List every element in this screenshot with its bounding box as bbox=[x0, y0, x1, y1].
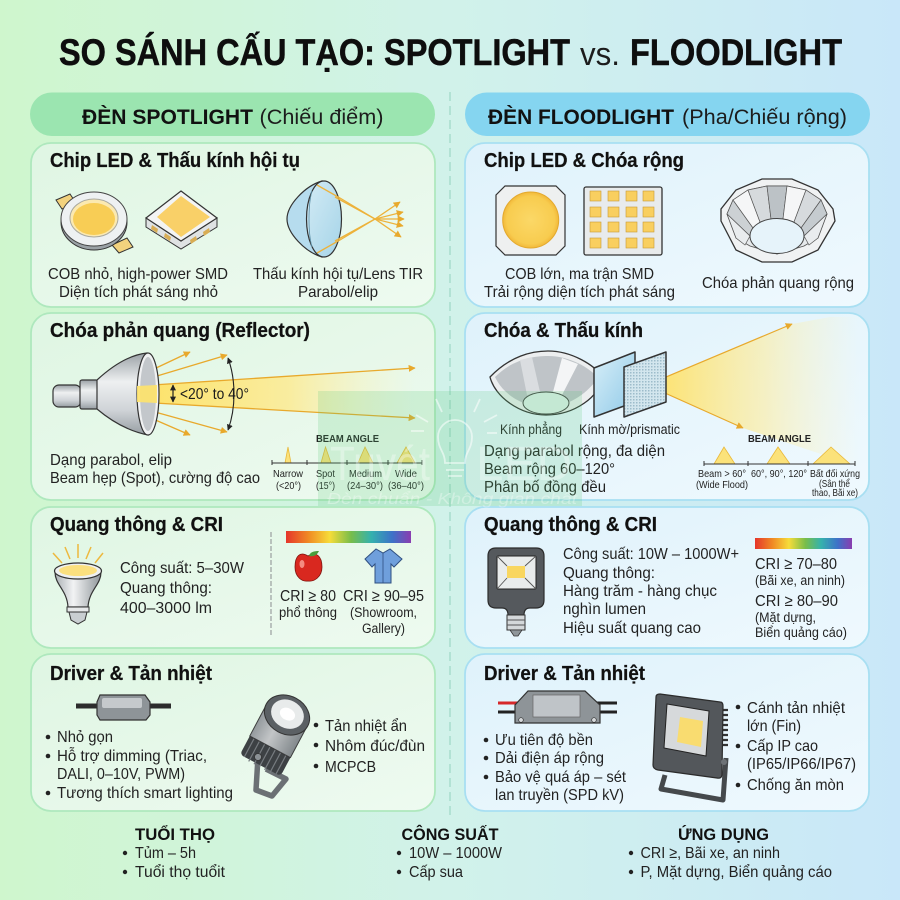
text: flat glass label: Kính phẳng bbox=[500, 422, 562, 437]
text: floodlight CRI values: CRI ≥ 70–80 bbox=[755, 556, 837, 573]
icon: rugged driver bbox=[498, 691, 617, 723]
icon: small COB chip bbox=[56, 192, 133, 253]
chart: spotlight beam angle: BEAM ANGLE bbox=[316, 433, 379, 445]
text: spotlight power and flux: Công suất: 5–30W bbox=[120, 560, 245, 577]
chart: spotlight beam angle: (<20°) bbox=[276, 480, 301, 492]
header: floodlight column: ĐÈN FLOODLIGHT bbox=[488, 106, 674, 129]
icon: shirt bbox=[365, 549, 402, 583]
panel: spotlight driver and heat sink bbox=[31, 654, 435, 811]
chart: floodlight beam angle: 60°, 90°, 120° bbox=[751, 468, 807, 480]
text: heat sink bullets bbox=[736, 700, 856, 794]
icon: floodlight fixture with fins bbox=[653, 694, 728, 800]
text: reflector description: Dạng parabol, elip bbox=[50, 452, 172, 469]
text: heat sink bullets: MCPCB bbox=[325, 759, 376, 776]
header: floodlight column bbox=[465, 92, 870, 136]
chart: floodlight beam angle: Bất đối xứng bbox=[810, 468, 860, 480]
text: driver bullets: DALI, 0–10V, PWM) bbox=[57, 766, 185, 783]
header: spotlight column: ĐÈN SPOTLIGHT bbox=[82, 106, 253, 129]
text: heat sink bullets: Nhôm đúc/đùn bbox=[325, 738, 425, 755]
icon: flat glass bbox=[594, 352, 635, 417]
text: floodlight CRI values: (Mặt dựng, bbox=[755, 610, 816, 625]
wide beam bbox=[647, 317, 860, 467]
text: lens caption bbox=[253, 266, 423, 301]
panel: floodlight luminous flux and CRI bbox=[465, 507, 869, 648]
icon: large COB chip bbox=[496, 186, 565, 255]
chart: spotlight beam angle bbox=[272, 433, 424, 492]
heading: Chóa phản quang (Reflector) bbox=[50, 320, 310, 342]
title: SO SÁNH CẤU TẠO: SPOTLIGHT bbox=[59, 32, 570, 73]
title: vs. bbox=[580, 36, 620, 72]
text: prismatic glass label: Kính mờ/prismatic bbox=[579, 422, 680, 437]
icon: wide faceted reflector bbox=[721, 179, 835, 262]
text: chip caption bbox=[48, 266, 228, 301]
text: chip caption: Diện tích phát sáng nhỏ bbox=[59, 284, 218, 301]
text: driver bullets: Nhỏ gọn bbox=[57, 729, 113, 746]
icon: SMD matrix bbox=[584, 187, 662, 255]
footer: applications bbox=[629, 825, 832, 881]
watermark: Tuvét bbox=[330, 438, 430, 491]
text: floodlight driver bullets: Ưu tiên độ bền bbox=[495, 732, 593, 749]
text: floodlight driver bullets: lan truyền (SPD kV) bbox=[495, 787, 624, 804]
chart: floodlight beam angle: (Wide Flood) bbox=[696, 479, 748, 491]
text: floodlight power and flux: Hàng trăm - hàng chục bbox=[563, 583, 717, 600]
panel: spotlight reflector bbox=[31, 313, 435, 500]
panel: spotlight luminous flux and CRI bbox=[31, 507, 435, 648]
footer: power: Cấp sua bbox=[409, 864, 463, 881]
icon: apple bbox=[295, 551, 322, 581]
chart: spotlight beam angle: (24–30°) bbox=[347, 480, 383, 492]
colour spectrum bar bbox=[755, 538, 852, 549]
text: floodlight beam description: Phân bố đồng đều bbox=[484, 479, 606, 496]
chart: floodlight beam angle: (Sân thể bbox=[819, 478, 850, 490]
footer: lifetime: TUỔI THỌ bbox=[135, 825, 215, 844]
text: CRI showroom: Gallery) bbox=[362, 621, 405, 636]
chart: spotlight beam angle: Wide bbox=[395, 468, 417, 480]
text: heat sink bullets: Chống ăn mòn bbox=[747, 777, 844, 794]
text: chip caption: COB nhỏ, high-power SMD bbox=[48, 266, 228, 283]
chart: spotlight beam angle: Medium bbox=[349, 468, 382, 480]
text: heat sink bullets: Cánh tản nhiệt bbox=[747, 700, 846, 717]
chart: floodlight beam angle bbox=[696, 433, 860, 499]
text: CRI showroom: (Showroom, bbox=[350, 605, 417, 620]
watermark: LED bbox=[476, 438, 572, 491]
text: floodlight driver bullets: Bảo vệ quá áp – sét bbox=[495, 769, 627, 786]
text: CRI general bbox=[279, 588, 337, 620]
text: CRI showroom bbox=[343, 588, 424, 636]
text: floodlight CRI values: CRI ≥ 80–90 bbox=[755, 593, 838, 610]
footer: lifetime: Tủm – 5h bbox=[135, 845, 196, 862]
chart: spotlight beam angle: (36–40°) bbox=[388, 480, 424, 492]
text: floodlight CRI values: Biển quảng cáo) bbox=[755, 625, 847, 640]
footer: lifetime: Tuổi thọ tuổit bbox=[135, 863, 226, 881]
text: floodlight chip caption: COB lớn, ma trận SMD bbox=[505, 266, 654, 283]
text: CRI general: CRI ≥ 80 bbox=[280, 588, 336, 605]
icon: compact driver bbox=[76, 695, 171, 720]
heading: Driver & Tản nhiệt bbox=[484, 663, 645, 685]
icon: condensing lens bbox=[287, 181, 404, 257]
narrow beam bbox=[137, 352, 415, 435]
text: heat sink bullets: (IP65/IP66/IP67) bbox=[747, 756, 856, 773]
footer: applications: P, Mặt dựng, Biển quảng cáo bbox=[640, 863, 832, 881]
footer: applications: CRI ≥, Bãi xe, an ninh bbox=[640, 845, 780, 862]
title: FLOODLIGHT bbox=[630, 32, 842, 73]
chart: floodlight beam angle: Beam > 60° bbox=[698, 468, 746, 480]
heading: Chóa & Thấu kính bbox=[484, 320, 643, 342]
text: floodlight CRI values bbox=[755, 556, 847, 640]
text: floodlight beam description: Beam rộng 60–120° bbox=[484, 461, 615, 478]
icon: spotlight bulb bbox=[53, 544, 103, 624]
chart: spotlight beam angle: Spot bbox=[316, 468, 335, 480]
text: heat sink bullets: Cấp IP cao bbox=[747, 738, 818, 755]
watermark bbox=[318, 391, 582, 508]
icon: spotlight fixture bbox=[239, 687, 317, 796]
text: CRI showroom: CRI ≥ 90–95 bbox=[343, 588, 424, 605]
heading: Quang thông & CRI bbox=[484, 514, 657, 536]
text: spotlight power and flux: 400–3000 lm bbox=[120, 600, 212, 617]
icon: reflector lamp bbox=[53, 353, 159, 435]
header: spotlight column bbox=[30, 92, 435, 136]
watermark: Đèn chuẩn - Không gian chất bbox=[327, 491, 578, 508]
text: CRI general: phổ thông bbox=[279, 605, 337, 620]
text: heat sink bullets: lớn (Fin) bbox=[747, 718, 801, 735]
text: reflector description bbox=[50, 452, 260, 487]
beam angle label: <20° to 40° bbox=[180, 386, 249, 403]
footer: lifetime bbox=[123, 825, 226, 881]
text: floodlight driver bullets bbox=[484, 732, 627, 804]
text: reflector caption: Chóa phản quang rộng bbox=[702, 275, 854, 292]
panel: floodlight reflector and lens bbox=[465, 313, 869, 500]
text: floodlight chip caption: Trải rộng diện tích phát sáng bbox=[484, 284, 675, 301]
heading: Chip LED & Chóa rộng bbox=[484, 150, 684, 172]
icon: SMD chip bbox=[146, 191, 217, 249]
icon: floodlight bulb bbox=[488, 548, 544, 636]
chart: floodlight beam angle: thao, Bãi xe) bbox=[812, 487, 858, 499]
text: floodlight power and flux: Công suất: 10W – 1000W+ bbox=[563, 546, 739, 563]
text: reflector description: Beam hẹp (Spot), cường độ cao bbox=[50, 470, 260, 487]
text: driver bullets: Tương thích smart lighting bbox=[57, 785, 233, 802]
text: floodlight chip caption bbox=[484, 266, 675, 301]
icon: reflector bowl bbox=[490, 351, 603, 415]
text: floodlight power and flux: Quang thông: bbox=[563, 565, 655, 582]
chart: floodlight beam angle: BEAM ANGLE bbox=[748, 433, 811, 445]
text: floodlight power and flux bbox=[563, 546, 739, 637]
panel: floodlight driver and heat sink bbox=[465, 654, 869, 811]
text: floodlight driver bullets: Dải điện áp rộng bbox=[495, 750, 604, 767]
text: spotlight power and flux bbox=[120, 560, 245, 617]
footer: applications: ỨNG DỤNG bbox=[678, 825, 769, 844]
text: floodlight CRI values: (Bãi xe, an ninh) bbox=[755, 573, 845, 588]
icon: prismatic glass bbox=[624, 352, 666, 417]
panel: floodlight chip and reflector bbox=[465, 143, 869, 307]
text: spotlight power and flux: Quang thông: bbox=[120, 580, 212, 597]
text: heat sink bullets: Tản nhiệt ẩn bbox=[325, 717, 407, 735]
chart: spotlight beam angle: (15°) bbox=[316, 480, 335, 492]
footer: power: CÔNG SUẤT bbox=[402, 825, 499, 844]
text: heat sink bullets bbox=[314, 717, 425, 776]
text: driver bullets bbox=[46, 729, 233, 802]
panel: spotlight chip and lens bbox=[31, 143, 435, 307]
chart: spotlight beam angle: Narrow bbox=[273, 468, 303, 480]
text: lens caption: Thấu kính hội tụ/Lens TIR bbox=[253, 266, 423, 283]
heading: Driver & Tản nhiệt bbox=[50, 663, 212, 685]
footer: power bbox=[397, 825, 503, 881]
heading: Chip LED & Thấu kính hội tụ bbox=[50, 150, 300, 172]
header: floodlight column: (Pha/Chiếu rộng) bbox=[682, 106, 847, 129]
colour spectrum bar bbox=[286, 531, 411, 543]
text: lens caption: Parabol/elip bbox=[298, 284, 378, 301]
text: floodlight beam description bbox=[484, 443, 665, 496]
text: driver bullets: Hỗ trợ dimming (Triac, bbox=[57, 746, 207, 765]
footer: power: 10W – 1000W bbox=[409, 845, 503, 862]
text: floodlight power and flux: nghìn lumen bbox=[563, 601, 646, 618]
heading: Quang thông & CRI bbox=[50, 514, 223, 536]
beam angle arc bbox=[228, 358, 234, 430]
header: spotlight column: (Chiếu điểm) bbox=[260, 106, 384, 129]
text: floodlight beam description: Dạng parabol rộng, đa diện bbox=[484, 443, 665, 460]
text: floodlight power and flux: Hiệu suất quang cao bbox=[563, 620, 701, 637]
